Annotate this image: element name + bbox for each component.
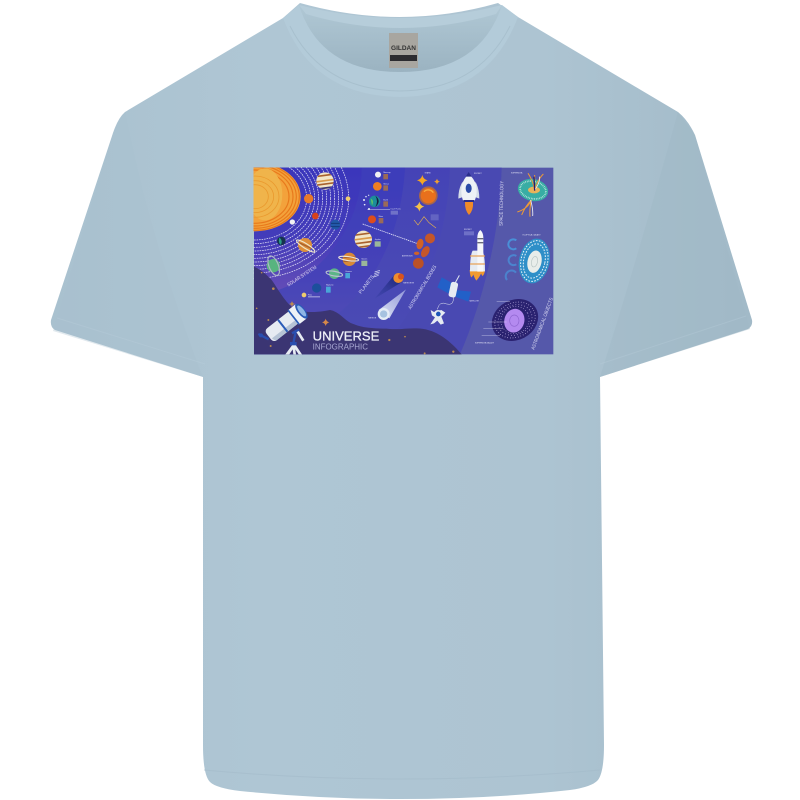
comet: [376, 273, 404, 297]
tripod: [285, 344, 302, 354]
antenna: [455, 275, 459, 283]
back collar band: [299, 5, 502, 28]
saturn: [295, 238, 316, 254]
tube band: [277, 319, 288, 332]
meteorite label: METEORITE: [403, 282, 415, 284]
neck label: [389, 33, 418, 68]
eyepiece: [258, 334, 269, 339]
front collar band: [283, 5, 518, 97]
objective: [287, 304, 307, 325]
flames: [470, 270, 485, 281]
window: [466, 184, 472, 193]
title: [313, 328, 379, 352]
dark foreground hills: [254, 267, 462, 354]
panel left: [437, 277, 453, 293]
gauges: [506, 239, 516, 280]
sun core: [254, 168, 282, 220]
flame: [465, 202, 473, 215]
star large: [417, 175, 428, 186]
venus entry: Venus: [383, 183, 389, 185]
heading: solar system: SOLAR SYSTEM: [286, 265, 318, 288]
collar: [283, 5, 518, 97]
core: [502, 306, 527, 335]
sun core rings: [254, 176, 280, 218]
sleeve seam shading right: [600, 112, 750, 377]
gauge 1: [508, 239, 516, 249]
title sub: INFOGRAPHIC: [313, 342, 368, 352]
meteor: [368, 289, 406, 320]
printed universe infographic: [254, 168, 554, 354]
earth entry: Dwarf Planets: [391, 208, 401, 211]
lens: [293, 302, 310, 321]
star low: [414, 202, 424, 212]
asteroids: [413, 233, 435, 269]
tether: [437, 297, 453, 309]
heading: space technology: SPACE TECHNOLOGY: [499, 180, 505, 226]
neptune: [330, 220, 340, 230]
body: [461, 174, 477, 202]
gauge 3: [506, 271, 516, 280]
stars label: STARS: [425, 171, 431, 174]
bands: [477, 239, 483, 243]
label band: [390, 55, 417, 61]
mars entry: Mars: [379, 215, 383, 218]
mercury entry: Mercury: [383, 171, 391, 174]
boosters: [470, 251, 485, 271]
background: astronomical objects band: [450, 168, 554, 354]
body: [448, 281, 459, 298]
nose: [466, 172, 472, 177]
telescope: [258, 302, 310, 354]
label: SUPERNOVA GALAXY: [475, 341, 495, 344]
tube assembly: [263, 302, 310, 344]
tube shading: [272, 319, 300, 342]
fins: [458, 182, 479, 199]
earth entry: [363, 195, 401, 215]
inside neck: [299, 5, 502, 72]
meteor: METEOR: [368, 318, 377, 320]
title main: UNIVERSE: [313, 328, 379, 343]
heading: astronomical bodies: ASTRONOMICAL BODIES: [407, 264, 439, 311]
callout lines: [482, 302, 510, 336]
disc: [516, 176, 550, 204]
spiral arms: [517, 238, 552, 284]
background: astronomical bodies band: [405, 168, 450, 169]
background: planets band: [362, 168, 405, 174]
earth: [277, 237, 286, 245]
tube: [264, 310, 300, 343]
asteroids label: ASTEROIDS: [402, 255, 413, 258]
elliptical galaxy: [475, 291, 546, 349]
panel right: [455, 290, 471, 302]
venus: [304, 194, 313, 203]
label: ROCKET: [464, 229, 472, 231]
background: space technology band: [367, 168, 502, 354]
hem shading: [204, 770, 600, 779]
star small: [434, 179, 440, 185]
jets: [517, 173, 543, 217]
heading: planets: PLANETS: [358, 274, 376, 295]
pluto orbit body: [346, 196, 350, 201]
rocket two: [464, 229, 485, 281]
sleeve seam shading left: [53, 112, 203, 377]
satellite: [437, 275, 480, 303]
solar system planets: [265, 172, 350, 277]
label: ROCKET: [474, 173, 482, 175]
label brand: GILDAN: [391, 45, 416, 52]
uranus entry: Uranus: [345, 270, 352, 273]
background: solar system band: [254, 251, 330, 290]
stripe: [463, 200, 474, 202]
asteroid belt line: [363, 224, 417, 243]
jupiter entry: Jupiter: [375, 238, 381, 241]
heading: astronomical objects: ASTRONOMICAL OBJECTS: [530, 297, 555, 351]
mercury: [290, 219, 295, 225]
saturn entry: Saturn: [361, 257, 367, 260]
label tag: [389, 33, 418, 68]
objective band: [287, 310, 300, 325]
collar stitching: [290, 26, 510, 91]
earth entry: Earth: [383, 198, 388, 201]
constellation: [414, 214, 439, 228]
uranus: [266, 255, 280, 276]
mars: [312, 213, 319, 219]
spiral galaxy: [515, 236, 554, 286]
core: [525, 249, 544, 274]
planets column: [302, 171, 417, 297]
sun star: [419, 186, 438, 205]
sun: [207, 162, 301, 231]
pluto entry: Pluto: [308, 293, 312, 296]
mount: [293, 330, 296, 343]
star speckle: [488, 295, 542, 345]
outer disc: [484, 291, 546, 349]
gauge 2: [509, 255, 516, 265]
background stars: [256, 272, 454, 354]
jupiter: [315, 172, 335, 190]
core: [477, 230, 483, 272]
label: SUPERNOVA: [511, 172, 523, 175]
helmet: [434, 310, 442, 318]
suit: [430, 310, 445, 325]
rocket one: [458, 172, 482, 215]
label: SATELLITE: [469, 300, 480, 303]
orbits: [254, 168, 349, 279]
neptune entry: Neptune: [326, 284, 334, 287]
sun disc: [207, 162, 301, 231]
stars: [414, 171, 440, 228]
spiral galaxy label: ELLIPTICAL GALAXY: [523, 234, 541, 237]
supernova: [511, 172, 550, 217]
outer disc: [515, 236, 554, 286]
right sleeve hem: [600, 316, 746, 364]
astronaut: [430, 297, 453, 325]
left sleeve hem: [57, 318, 205, 364]
sun rings: [254, 168, 300, 231]
